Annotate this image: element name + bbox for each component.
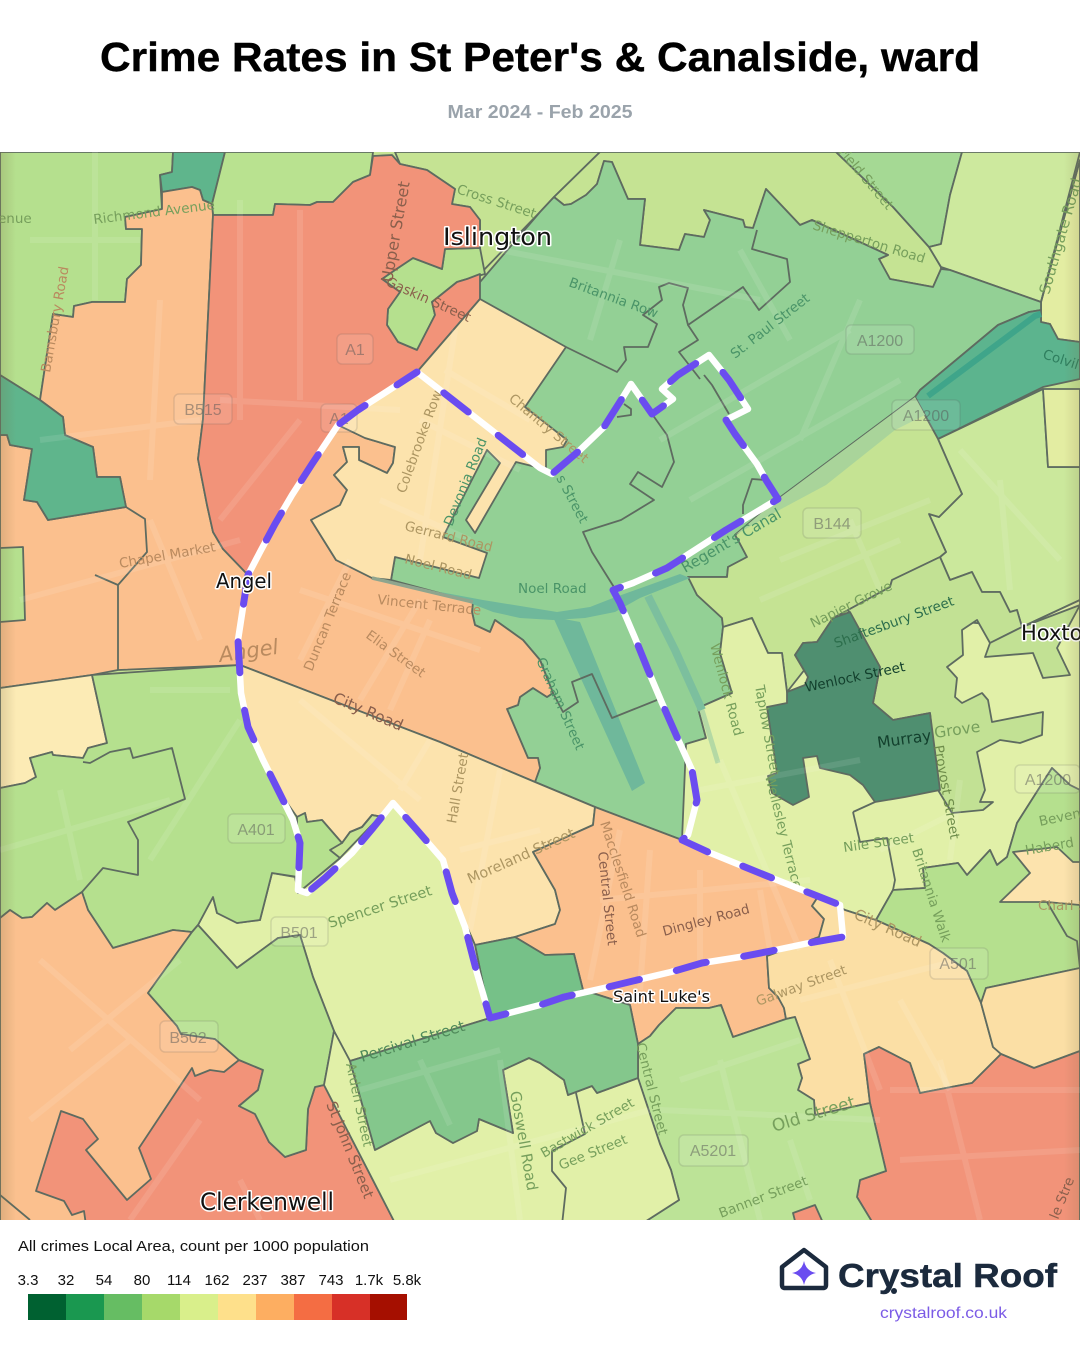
canal water	[372, 314, 1041, 791]
legend values: 387	[280, 1272, 306, 1289]
street labels: Macclesfield Road	[596, 819, 649, 939]
street labels: Wenlock Road	[706, 642, 746, 738]
street labels	[0, 144, 1080, 1222]
street labels: Taplow Street	[751, 683, 783, 777]
place names: Angel	[216, 569, 272, 593]
place names	[200, 223, 1080, 1216]
road number shields: A1	[345, 342, 365, 359]
street labels: Chantry Street	[505, 391, 592, 467]
street labels: Grove	[933, 718, 981, 742]
street labels: Murray	[876, 727, 932, 752]
legend values: 1.7k	[355, 1272, 384, 1289]
road number shields: A5201	[690, 1143, 736, 1160]
legend values: 743	[318, 1272, 344, 1289]
street labels: s Street	[552, 472, 591, 526]
street labels: Goswell Road	[506, 1090, 541, 1192]
map edge shading	[0, 152, 1080, 1220]
road number shields: B502	[169, 1030, 207, 1047]
street labels: Britannia Row	[567, 275, 660, 322]
street labels: Galway Street	[754, 962, 849, 1010]
legend title: All crimes Local Area, count per 1000 population	[18, 1238, 369, 1255]
legend values: 32	[58, 1272, 74, 1289]
street labels: Arden Street	[342, 1062, 375, 1148]
street labels: Wenlock Street	[804, 659, 907, 696]
street labels: le Stre	[1047, 1175, 1078, 1221]
legend values	[18, 1272, 422, 1289]
legend values: 162	[204, 1272, 230, 1289]
street labels: City Road	[851, 905, 924, 951]
road number shields: A1200	[857, 333, 903, 350]
street labels: Wellesley Terrace	[761, 773, 805, 891]
legend	[18, 1238, 422, 1320]
street labels: St John Street	[322, 1099, 378, 1201]
street labels: Gee Street	[557, 1132, 630, 1174]
street labels: Provost Street	[930, 744, 962, 841]
legend colour scale	[28, 1294, 407, 1320]
road number shields	[160, 325, 1080, 1166]
legend values: 114	[167, 1272, 191, 1289]
street labels: Britannia Walk	[908, 846, 954, 945]
street labels: Cross Street	[455, 182, 538, 222]
title: Crime Rates in St Peter's & Canalside, ward	[100, 34, 980, 80]
street labels: Gerrard Road	[403, 518, 494, 556]
street labels: Barnsbury Road	[38, 265, 73, 374]
street labels: Banner Street	[717, 1173, 810, 1222]
legend values: 5.8k	[393, 1272, 422, 1289]
ward boundary: St Peter's & Canalside	[238, 355, 843, 1018]
road number shields: B515	[184, 402, 222, 419]
road number shields: B144	[813, 516, 851, 533]
street labels: Colebrooke Row	[394, 388, 446, 495]
road number shields: A501	[939, 956, 977, 973]
legend values: 80	[134, 1272, 150, 1289]
street labels: Old Street	[770, 1092, 858, 1137]
legend values: 237	[242, 1272, 268, 1289]
street labels: Dingley Road	[661, 901, 751, 940]
road number shields: A1200	[903, 408, 949, 425]
street labels: Central Street	[594, 851, 620, 946]
street labels: Moreland Street	[465, 826, 578, 888]
street labels: Noel Road	[403, 551, 473, 583]
street labels: Duncan Terrace	[301, 570, 355, 673]
place names: Islington	[443, 223, 552, 251]
street labels: Shepperton Road	[811, 218, 927, 267]
street labels: Percival Street	[358, 1017, 467, 1066]
street labels: Colvil	[1041, 347, 1080, 373]
place names: Clerkenwell	[200, 1188, 334, 1216]
street labels: Central Street	[632, 1041, 670, 1137]
icon: house with sparkle	[782, 1250, 826, 1288]
street labels: Noel Road	[518, 581, 587, 597]
street labels: Angel	[215, 635, 280, 667]
street labels: St. Paul Street	[728, 291, 813, 362]
street labels: Devonia Road	[441, 436, 491, 528]
street labels: City Road	[330, 689, 406, 735]
street labels: Elia Street	[363, 627, 428, 681]
street labels: Regent's Canal	[678, 505, 784, 576]
street labels: Bastwick Street	[538, 1095, 637, 1161]
minor road network	[0, 152, 1080, 1220]
street labels: Upper Street	[377, 180, 414, 284]
street labels: Napier Grove	[808, 578, 895, 632]
street labels: Shaftesbury Street	[832, 593, 956, 652]
street labels: Spencer Street	[326, 883, 434, 932]
street labels: Gaskin Street	[383, 274, 473, 326]
street labels: Chapel Market	[118, 539, 217, 572]
street labels: Richmond Avenue	[93, 197, 216, 228]
website: crystalroof.co.uk	[880, 1305, 1008, 1322]
street labels: Graham Street	[532, 655, 587, 753]
logo: Crystal Roof	[782, 1250, 1058, 1322]
place names: Saint Luke's	[613, 987, 710, 1006]
street labels: Vincent Terrace	[377, 592, 482, 619]
legend values: 54	[96, 1272, 112, 1289]
road number shields: A1200	[1025, 772, 1071, 789]
road number shields: A401	[237, 822, 275, 839]
road number shields: B501	[280, 925, 318, 942]
road number shields: A1	[329, 411, 349, 428]
date range subtitle: Mar 2024 - Feb 2025	[448, 101, 632, 122]
wordmark: Crystal Roof	[838, 1257, 1058, 1294]
internal boundary lines	[0, 160, 1080, 1225]
legend values: 3.3	[18, 1272, 38, 1289]
street labels: Nile Street	[842, 830, 915, 856]
street labels: Hall Street	[444, 752, 472, 825]
areas: crime rate neighbourhood polygons	[0, 152, 1080, 1225]
street labels: Field Street	[835, 144, 896, 213]
street labels: Haberd	[1024, 835, 1075, 859]
